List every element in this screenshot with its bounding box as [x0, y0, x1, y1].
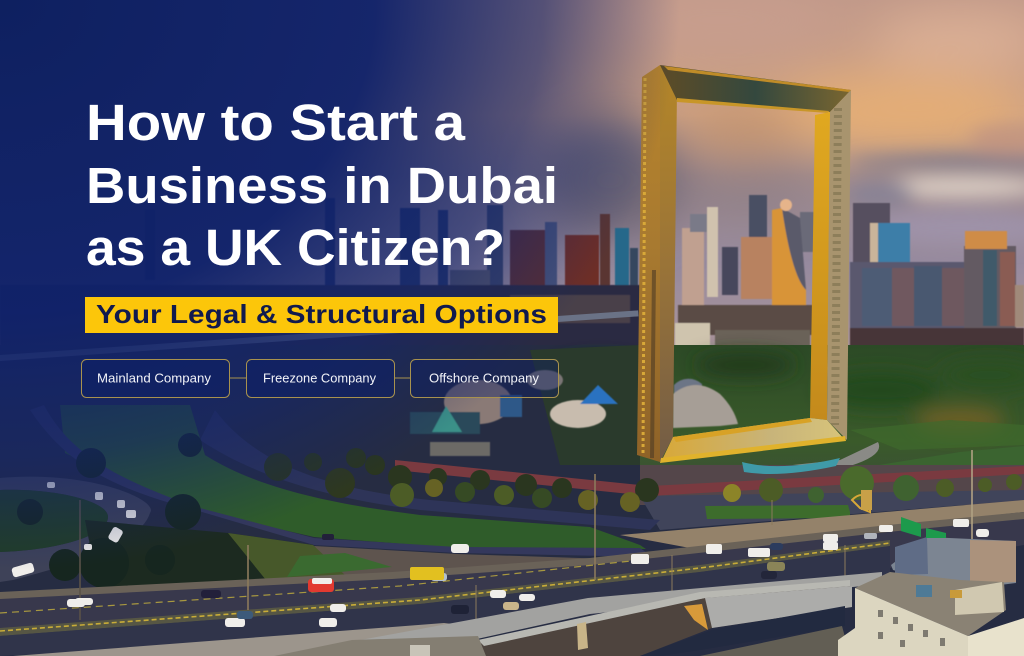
title	[86, 94, 558, 276]
left column front	[660, 65, 677, 462]
highway	[0, 512, 1024, 656]
skyline behind the frame	[0, 195, 1024, 360]
overpass	[274, 572, 882, 656]
right column inner gold	[810, 112, 830, 420]
bottom right building	[838, 537, 1024, 656]
lawn and left interchange	[0, 310, 660, 597]
sky with clouds	[0, 0, 1024, 350]
company type options	[82, 360, 558, 398]
top beam	[660, 65, 851, 112]
left outer patterned face	[637, 65, 660, 462]
poles	[80, 450, 972, 632]
bottom beam	[661, 418, 845, 462]
option: offshore company: Offshore Company	[429, 372, 540, 386]
option: freezone company	[246, 360, 394, 398]
road signs	[852, 490, 946, 538]
cars	[11, 482, 989, 627]
right patterned face	[827, 90, 851, 440]
domes and pavilion	[410, 370, 738, 456]
Dubai Frame landmark	[637, 65, 851, 474]
option: offshore company	[410, 360, 558, 398]
title: How to Start a	[86, 94, 466, 151]
connector lines	[229, 377, 410, 379]
trees	[17, 433, 1022, 588]
option: mainland company: Mainland Company	[97, 372, 212, 386]
title: as a UK Citizen?	[86, 219, 505, 276]
title: Business in Dubai	[86, 157, 558, 214]
option: freezone company: Freezone Company	[263, 372, 377, 386]
ground and park	[0, 345, 1024, 656]
option: mainland company	[82, 360, 230, 398]
pool at frame base	[742, 458, 840, 474]
subtitle banner: Your Legal & Structural Options	[96, 299, 547, 329]
subtitle banner	[85, 297, 558, 333]
